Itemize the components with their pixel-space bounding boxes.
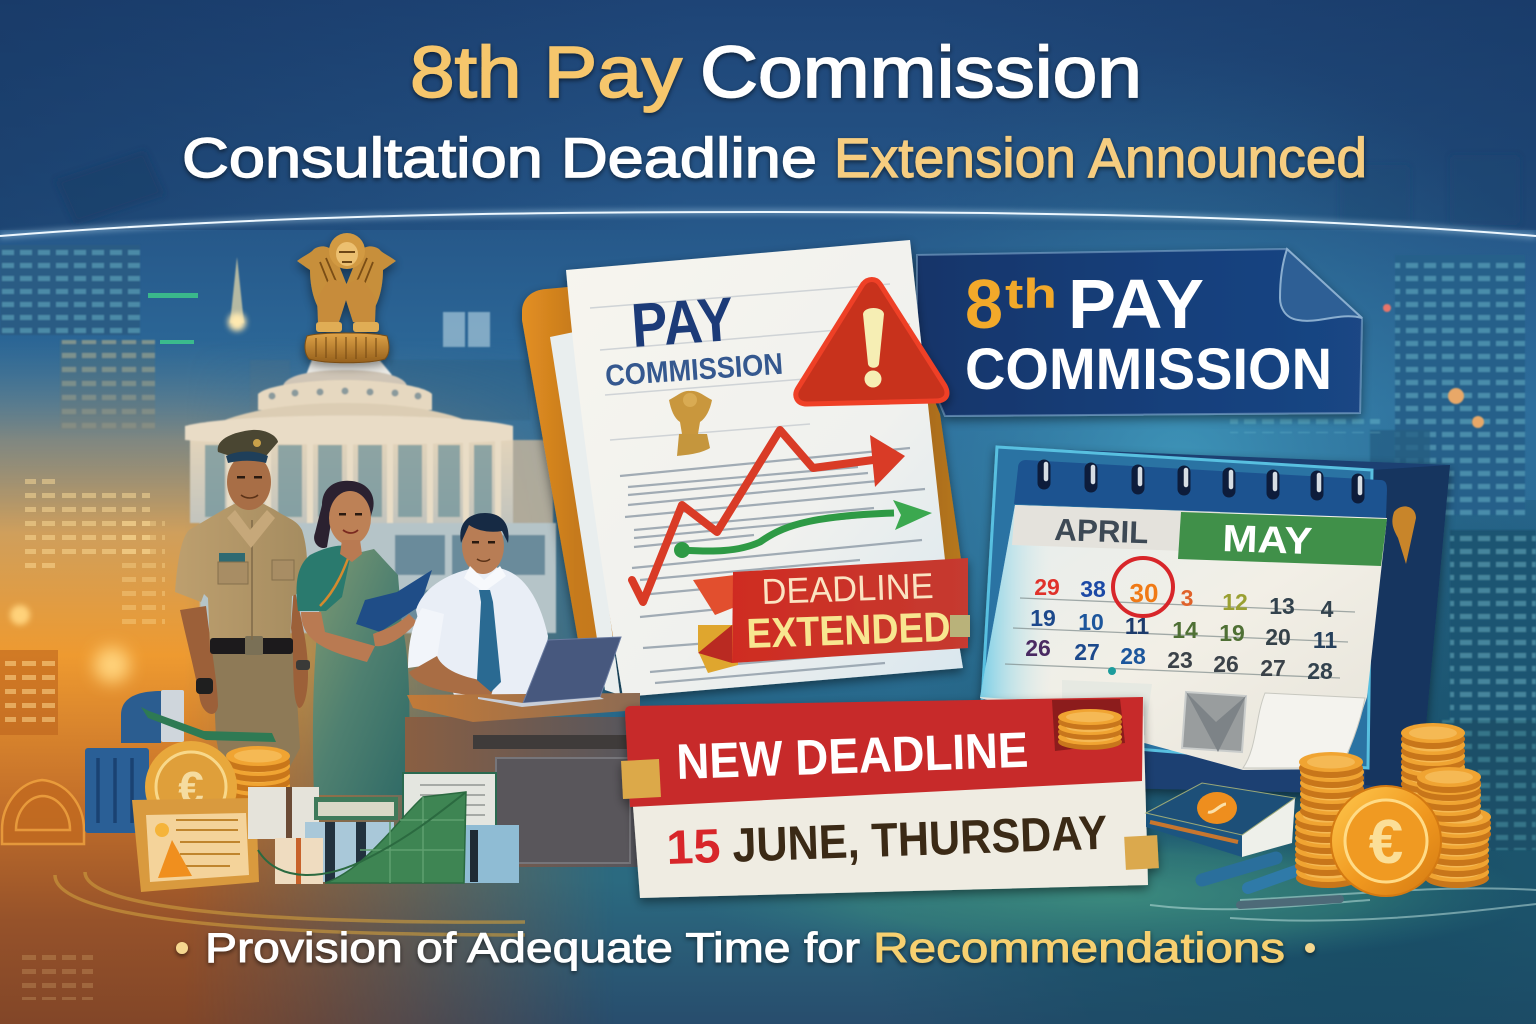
deadline extended ribbon: EXTENDED: [746, 603, 951, 657]
footer text: Provision of Adequate Time for: [205, 924, 860, 971]
calendar back board: [986, 447, 1450, 795]
banner text: 8: [965, 265, 1003, 343]
calendar dates: 19: [1030, 605, 1056, 631]
green arrow: [674, 500, 932, 558]
title: [182, 33, 1367, 189]
calendar dates: 30: [1130, 578, 1158, 608]
banner text: [965, 265, 1332, 402]
left pile: coins, briefcase and documents: [85, 690, 519, 892]
briefcase: [85, 690, 184, 833]
red trend arrow: [632, 430, 905, 602]
book stacks: [248, 773, 519, 884]
calendar binding bar: [1014, 460, 1387, 518]
new deadline text: NEW DEADLINE: [675, 722, 1029, 790]
calendar dates: 20: [1265, 624, 1291, 650]
title line 1: [410, 33, 1142, 113]
calendar dates: 12: [1222, 589, 1248, 615]
back sheet: [550, 332, 620, 695]
coin stack left: [226, 746, 290, 802]
deadline date: 15: [666, 820, 721, 875]
pens: [1202, 858, 1340, 905]
calendar dates: 38: [1080, 576, 1106, 602]
blue banner: 8th Pay Commission: [917, 249, 1362, 416]
lights: [1383, 304, 1484, 428]
lotus base: [305, 333, 389, 363]
right pile: notebook, pens and coins: [1146, 723, 1491, 905]
card body: [626, 697, 1148, 898]
deadline date: JUNE, THURSDAY: [731, 807, 1108, 873]
calendar dates: 26: [1213, 651, 1239, 677]
coin stack back: [1401, 723, 1465, 806]
government building: [185, 357, 556, 633]
title line 2: [182, 126, 1367, 189]
calendar dates: 27: [1074, 639, 1100, 665]
calendar dates: 13: [1269, 593, 1295, 619]
calendar dates: 3: [1181, 585, 1193, 611]
wings: [297, 246, 396, 316]
calendar dates: 14: [1172, 617, 1198, 643]
calendar dates: 23: [1167, 647, 1193, 673]
large euro coin left: [145, 741, 237, 833]
arc divider: [0, 212, 1536, 236]
warning triangle: [796, 280, 947, 404]
coin stack left of big coin: [1295, 752, 1364, 888]
heading: PAY: PAY: [629, 285, 736, 361]
legs and chest: [317, 278, 376, 322]
calendar dates: 26: [1025, 635, 1051, 661]
page curl: [1243, 693, 1365, 768]
title line 2: Consultation Deadline: [182, 126, 817, 189]
coin pocket: [1052, 699, 1125, 751]
person: police officer: [175, 430, 310, 778]
banner text: th: [1005, 270, 1057, 317]
small emblem: [669, 391, 712, 456]
deadline extended ribbon: [693, 558, 970, 673]
left bullet: [176, 942, 188, 954]
calendar dates: 28: [1120, 643, 1146, 669]
april header: [1012, 505, 1220, 552]
calendar dates: 27: [1260, 655, 1286, 681]
right bullet: [1305, 943, 1315, 953]
green growth chart: [258, 792, 466, 883]
red band: [625, 697, 1143, 807]
calendar: [980, 447, 1450, 795]
calendar dates: 11: [1313, 627, 1337, 653]
title line 1: 8th Pay: [410, 33, 682, 113]
calendar dates: 10: [1078, 609, 1104, 635]
title line 2: Extension Announced: [834, 126, 1367, 189]
calendar bottom icons: [1062, 667, 1246, 752]
banner text: PAY: [1068, 265, 1204, 343]
may header: [1178, 512, 1387, 566]
notebook: [1146, 783, 1295, 857]
desk with laptop: [405, 637, 640, 867]
banner text: COMMISSION: [965, 337, 1332, 402]
calendar dates: 29: [1034, 574, 1060, 600]
text lines on document: [620, 448, 925, 683]
large euro coin left: €: [178, 762, 204, 814]
april header: APRIL: [1054, 512, 1149, 550]
new deadline card: [621, 697, 1159, 898]
calendar clip: [1392, 506, 1416, 564]
red circle around 30: [1113, 558, 1173, 616]
gold corner tabs: [621, 759, 1159, 870]
footer text: [205, 924, 1285, 971]
calendar grid lines: [1005, 598, 1355, 678]
paper: [566, 240, 963, 697]
calendar dates: 11: [1125, 613, 1149, 639]
people group: [175, 430, 548, 795]
may header: MAY: [1222, 518, 1313, 563]
person: woman in saree: [296, 481, 432, 795]
calendar dates: [1025, 574, 1337, 684]
green signs: [148, 293, 198, 344]
title line 1: Commission: [700, 33, 1142, 113]
clipboard: [522, 259, 966, 640]
emblem: national emblem: [297, 233, 396, 363]
footer text: Recommendations: [873, 924, 1285, 971]
spiral rings: [1044, 464, 1360, 497]
large euro coin right: €: [1369, 808, 1403, 877]
banner corner curl: [1280, 249, 1362, 321]
calendar dates: 28: [1307, 658, 1333, 684]
calendar page: [980, 505, 1387, 770]
document with clipboard: [522, 240, 970, 697]
lion head: [329, 233, 365, 269]
calendar dates: 19: [1219, 620, 1245, 646]
pen: [141, 707, 276, 742]
deadline extended ribbon: DEADLINE: [761, 565, 934, 612]
heading: COMMISSION: COMMISSION: [604, 348, 784, 393]
footer line: [176, 924, 1315, 971]
calendar dates: 4: [1321, 596, 1334, 622]
certificate box: [132, 798, 259, 892]
person: man at laptop: [408, 513, 548, 700]
coin stack right: [1417, 767, 1491, 888]
large euro coin right: [1331, 786, 1441, 896]
